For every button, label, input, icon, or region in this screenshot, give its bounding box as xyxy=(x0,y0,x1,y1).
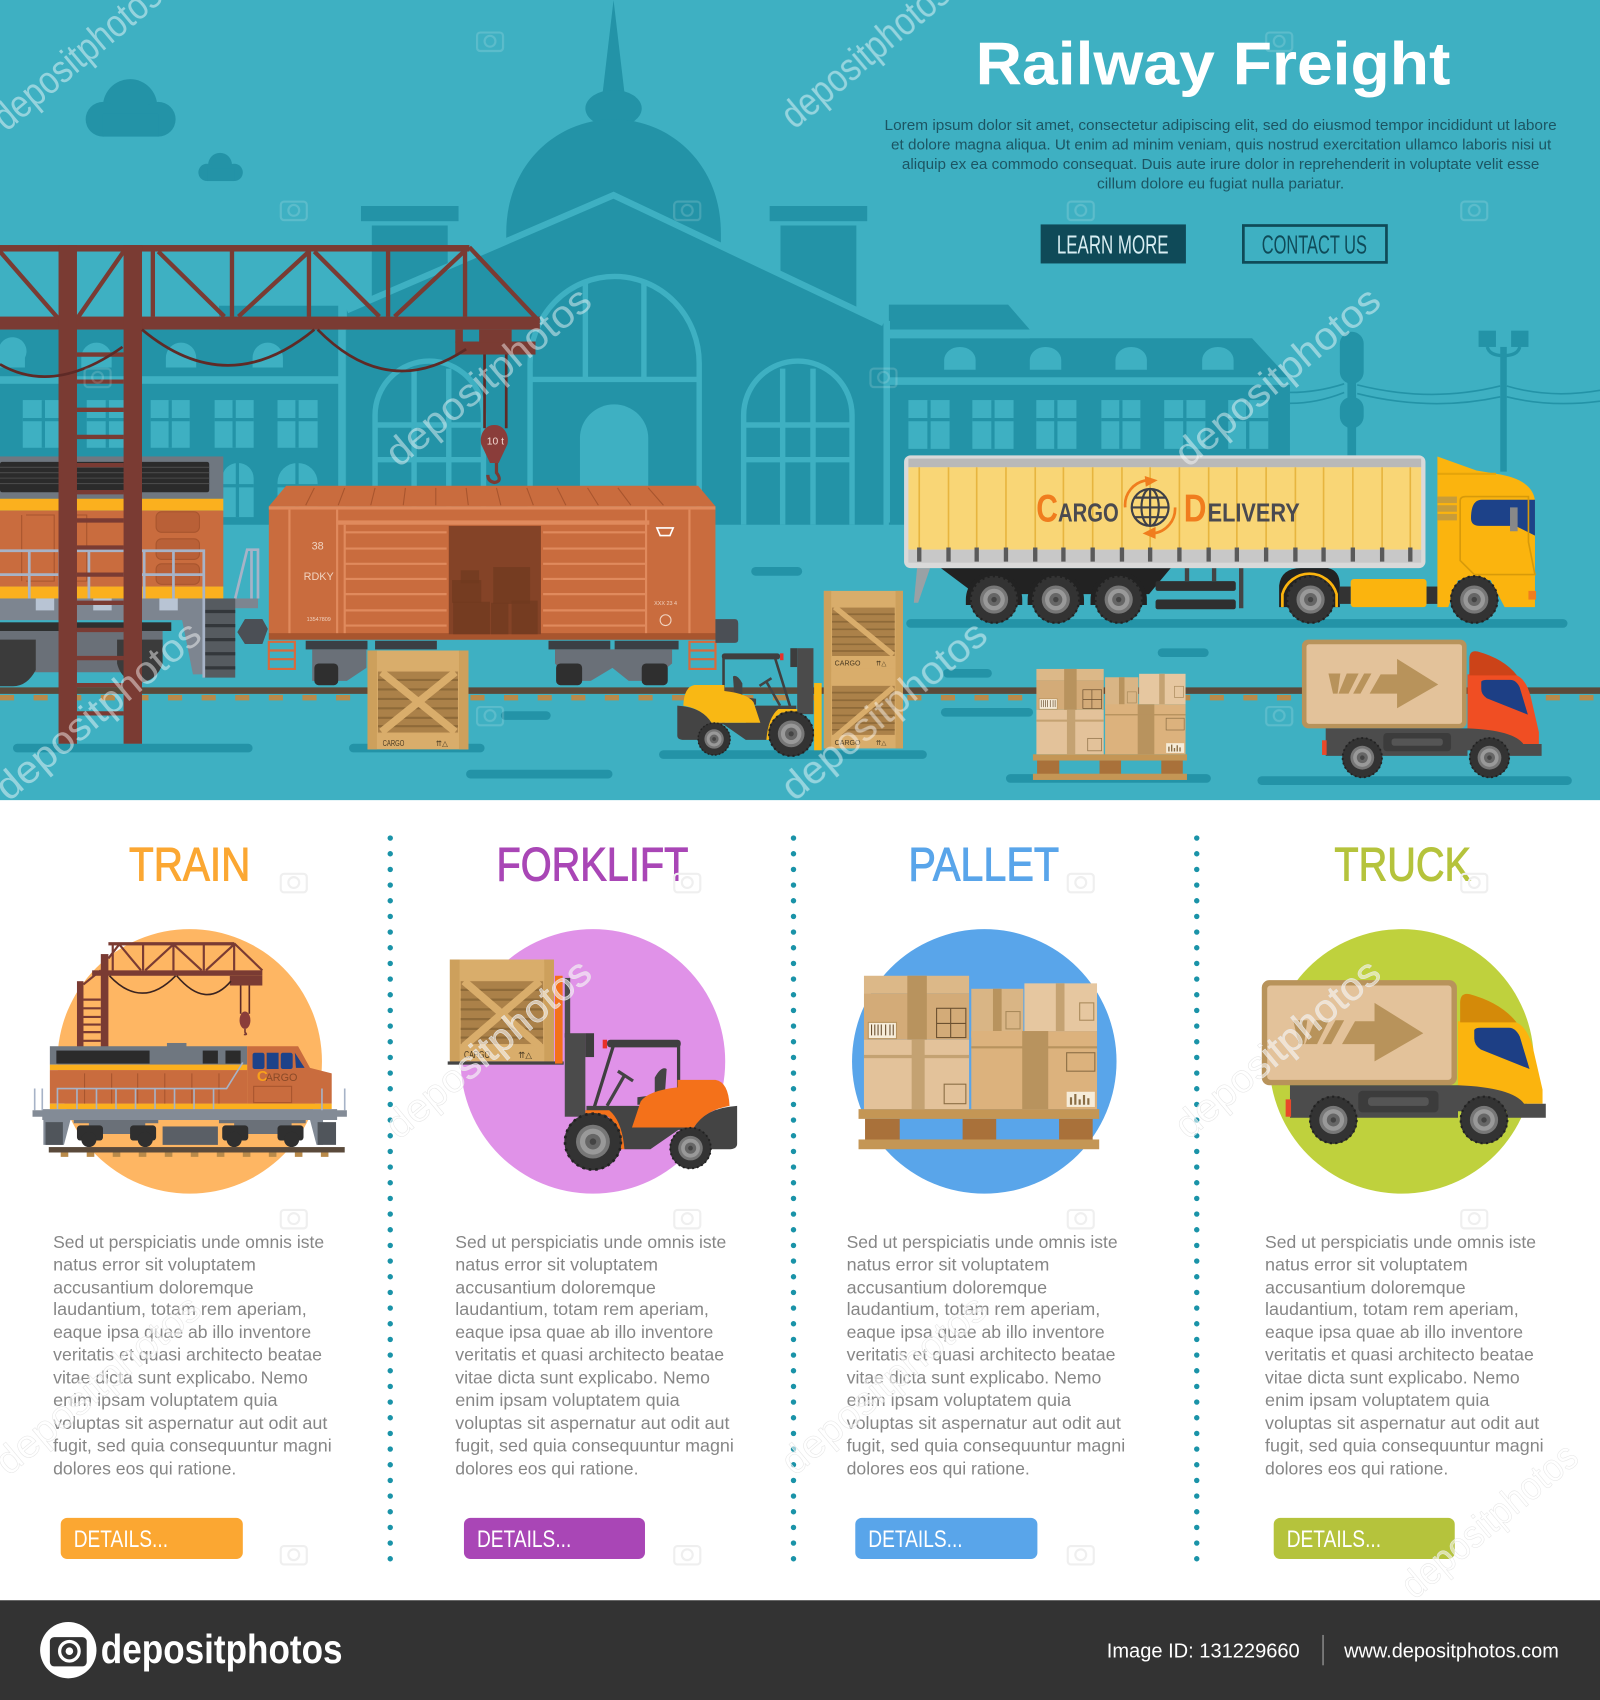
hero pallet with boxes xyxy=(1033,669,1187,780)
semi truck with cargo delivery trailer xyxy=(904,455,1536,623)
heading: forklift: FORKLIFT xyxy=(496,838,688,891)
boxcar: XXX 23 4 xyxy=(654,601,677,607)
text: train: natus error sit voluptatem xyxy=(53,1255,256,1275)
hero paragraph: et dolore magna aliqua. Ut enim ad minim veniam, quis nostrud exercitation ullamco laboris nisi ut xyxy=(891,137,1552,154)
text: forklift: voluptas sit aspernatur aut odit aut xyxy=(455,1413,730,1433)
text: depositphotos xyxy=(773,612,996,809)
button: details pallet xyxy=(855,1518,1037,1559)
text: truck: laudantium, totam rem aperiam, xyxy=(1265,1299,1519,1319)
text: forklift xyxy=(455,1232,734,1478)
stacked crates: ⇈△ xyxy=(876,660,887,668)
text: pallet: voluptas sit aspernatur aut odit aut xyxy=(847,1413,1121,1433)
button: details train xyxy=(61,1518,243,1559)
stacked crates: ⇈△ xyxy=(876,739,887,747)
stacked crates: CARGO xyxy=(835,740,861,747)
station building silhouette xyxy=(0,0,1290,525)
icon: forklift with crate: ⇈△ xyxy=(518,1050,532,1060)
boxcar: 13547809 xyxy=(307,617,331,623)
text: pallet: veritatis et quasi architecto beatae xyxy=(847,1345,1115,1365)
text: train: fugit, sed quia consequuntur magni xyxy=(53,1436,332,1456)
clouds xyxy=(86,79,243,181)
text: depositphotos xyxy=(1166,951,1389,1147)
text: depositphotos xyxy=(1166,279,1389,475)
text: truck: Sed ut perspiciatis unde omnis iste xyxy=(1265,1232,1536,1252)
button: contact us xyxy=(1243,226,1386,262)
text: pallet: dolores eos qui ratione. xyxy=(847,1458,1030,1478)
text: forklift: Sed ut perspiciatis unde omnis iste xyxy=(455,1232,726,1252)
icon: pallet with boxes xyxy=(852,929,1117,1194)
panel: truck xyxy=(1262,838,1546,1559)
icon: forklift with crate xyxy=(448,929,737,1194)
crane: 10 t xyxy=(487,437,504,448)
text: forklift: dolores eos qui ratione. xyxy=(455,1458,638,1478)
hero paragraph: aliquip ex ea commodo consequat. Duis aute irure dolor in reprehenderit in voluptate velit esse xyxy=(902,156,1539,173)
text: forklift: enim ipsam voluptatem quia xyxy=(455,1390,680,1410)
text: truck: dolores eos qui ratione. xyxy=(1265,1458,1448,1478)
text: forklift: fugit, sed quia consequuntur magni xyxy=(455,1436,734,1456)
text: truck: accusantium doloremque xyxy=(1265,1277,1466,1297)
text: train: dolores eos qui ratione. xyxy=(53,1458,236,1478)
text: train: veritatis et quasi architecto beatae xyxy=(53,1345,322,1365)
front crate: CARGO xyxy=(383,738,405,748)
footer image id: Image ID: 131229660 xyxy=(1107,1640,1300,1663)
text: pallet: natus error sit voluptatem xyxy=(847,1255,1049,1275)
button: details truck xyxy=(1274,1518,1455,1559)
footer website: www.depositphotos.com xyxy=(1343,1640,1559,1663)
front crate xyxy=(367,651,468,749)
button: learn more: LEARN MORE xyxy=(1057,230,1169,260)
icon: train and crane xyxy=(33,929,347,1194)
text: truck: enim ipsam voluptatem quia xyxy=(1265,1390,1489,1410)
text: depositphotos xyxy=(377,279,600,475)
semi truck with cargo delivery trailer: ARGO xyxy=(1058,497,1119,527)
panel: forklift xyxy=(448,838,737,1559)
text: forklift: vitae dicta sunt explicabo. Nemo xyxy=(455,1367,710,1387)
text: pallet: eaque ipsa quae ab illo inventore xyxy=(847,1322,1105,1342)
semi truck with cargo delivery trailer: C xyxy=(1036,487,1058,530)
ground shadows xyxy=(13,567,1572,785)
panel: train xyxy=(33,838,347,1559)
footer bar xyxy=(0,1600,1600,1700)
heading: pallet: PALLET xyxy=(908,838,1059,891)
button: details forklift: DETAILS... xyxy=(477,1526,571,1553)
text: train: Sed ut perspiciatis unde omnis iste xyxy=(53,1232,324,1252)
text: truck: fugit, sed quia consequuntur magni xyxy=(1265,1436,1544,1456)
button: details truck: DETAILS... xyxy=(1287,1526,1381,1553)
boxcar: 38 xyxy=(312,541,324,553)
text: pallet xyxy=(847,1232,1125,1478)
text: train: voluptas sit aspernatur aut odit aut xyxy=(53,1413,327,1433)
crane xyxy=(0,245,540,744)
text: forklift: veritatis et quasi architecto beatae xyxy=(455,1345,724,1365)
text: pallet: accusantium doloremque xyxy=(847,1277,1047,1297)
heading: train: TRAIN xyxy=(129,838,250,891)
text: pallet: laudantium, totam rem aperiam, xyxy=(847,1299,1100,1319)
stacked crates xyxy=(824,591,903,748)
button: learn more xyxy=(1041,224,1186,263)
text: forklift: laudantium, totam rem aperiam, xyxy=(455,1299,709,1319)
text: truck: vitae dicta sunt explicabo. Nemo xyxy=(1265,1367,1520,1387)
icon: train and crane: ARGO xyxy=(266,1072,297,1084)
button: details pallet: DETAILS... xyxy=(868,1526,963,1553)
boxcar: RDKY xyxy=(304,571,334,583)
text: train xyxy=(53,1232,332,1478)
front crate: ⇈△ xyxy=(436,739,449,748)
text: depositphotos xyxy=(773,1287,996,1484)
text: pallet: enim ipsam voluptatem quia xyxy=(847,1390,1071,1410)
signal and lamp post xyxy=(1290,331,1600,472)
hero paragraph: Lorem ipsum dolor sit amet, consectetur adipiscing elit, sed do eiusmod tempor incididunt ut labore xyxy=(885,117,1557,134)
hero background xyxy=(0,0,1600,800)
heading: truck: TRUCK xyxy=(1334,838,1471,891)
text: forklift: accusantium doloremque xyxy=(455,1277,656,1297)
text: train: accusantium doloremque xyxy=(53,1277,254,1297)
text: pallet: Sed ut perspiciatis unde omnis iste xyxy=(847,1232,1118,1252)
semi truck with cargo delivery trailer: D xyxy=(1184,487,1207,530)
footer logo: depositphotos xyxy=(101,1626,343,1672)
text: forklift: eaque ipsa quae ab illo inventore xyxy=(455,1322,713,1342)
panel: pallet xyxy=(847,838,1125,1559)
hero paragraph xyxy=(885,117,1557,193)
locomotive in hero xyxy=(0,456,268,686)
icon: forklift with crate: CARGO xyxy=(464,1050,490,1061)
stacked crates: CARGO xyxy=(835,661,861,668)
button: contact us: CONTACT US xyxy=(1262,230,1367,260)
text: truck: voluptas sit aspernatur aut odit aut xyxy=(1265,1413,1539,1433)
text: depositphotos xyxy=(377,951,600,1147)
footer logo xyxy=(40,1622,343,1678)
hero paragraph: cillum dolore eu fugiat nulla pariatur. xyxy=(1097,176,1344,193)
hero forklift xyxy=(677,648,822,756)
icon: delivery truck xyxy=(1262,929,1546,1194)
text: truck: veritatis et quasi architecto beatae xyxy=(1265,1345,1534,1365)
hero title: Railway Freight xyxy=(976,30,1450,98)
railway track xyxy=(0,687,1600,698)
hero delivery truck xyxy=(1302,640,1542,778)
text: truck: natus error sit voluptatem xyxy=(1265,1255,1468,1275)
button: details train: DETAILS... xyxy=(74,1526,168,1553)
text: train: eaque ipsa quae ab illo inventore xyxy=(53,1322,311,1342)
text: train: enim ipsam voluptatem quia xyxy=(53,1390,278,1410)
text: truck xyxy=(1265,1232,1544,1478)
text: train: vitae dicta sunt explicabo. Nemo xyxy=(53,1367,308,1387)
icon: train and crane: C xyxy=(257,1068,268,1085)
semi truck with cargo delivery trailer: ELIVERY xyxy=(1208,497,1300,527)
text: forklift: natus error sit voluptatem xyxy=(455,1255,658,1275)
text: pallet: fugit, sed quia consequuntur magni xyxy=(847,1436,1125,1456)
boxcar xyxy=(237,486,738,685)
text: train: laudantium, totam rem aperiam, xyxy=(53,1299,307,1319)
button: details forklift xyxy=(464,1518,645,1559)
text: pallet: vitae dicta sunt explicabo. Nemo xyxy=(847,1367,1101,1387)
text: truck: eaque ipsa quae ab illo inventore xyxy=(1265,1322,1523,1342)
